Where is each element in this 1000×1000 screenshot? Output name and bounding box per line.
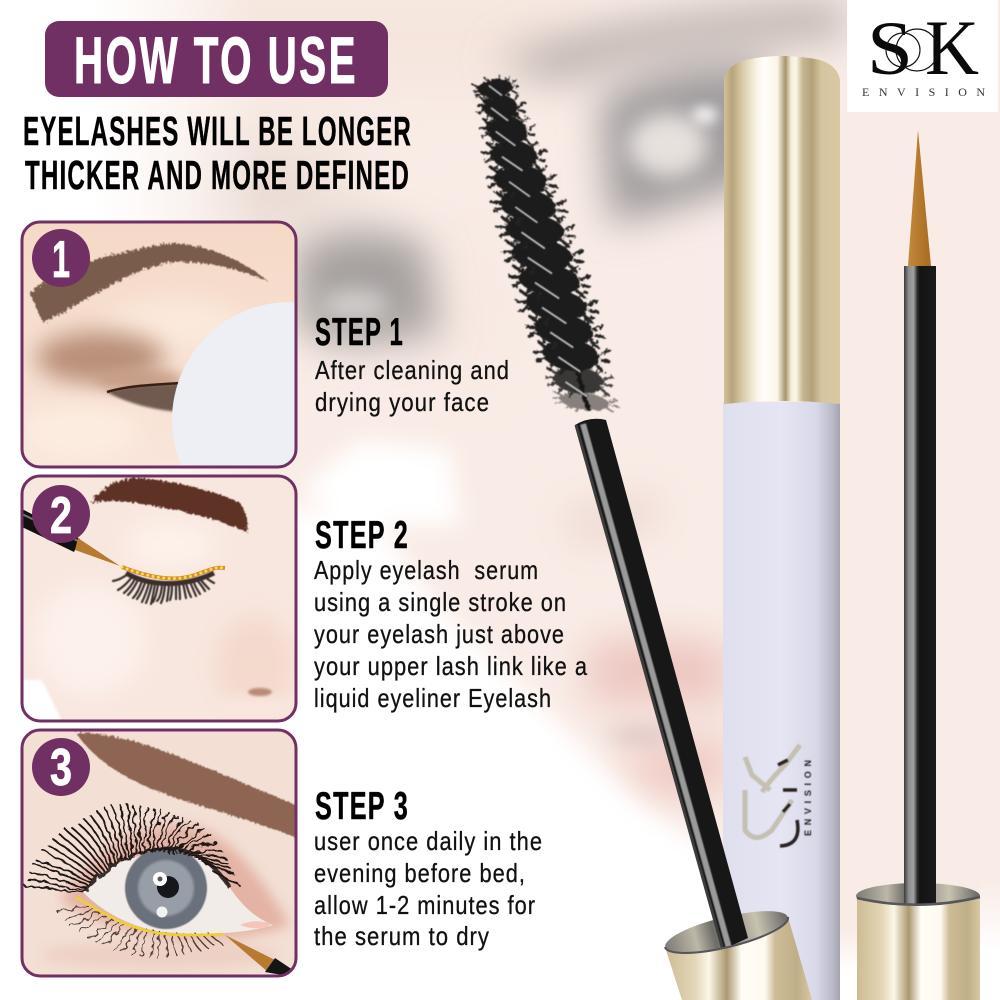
step 2 text: your eyelash just above <box>314 619 565 649</box>
subtitle <box>23 108 412 198</box>
tilted gold collar <box>665 917 812 1000</box>
dotted serum line <box>122 567 225 578</box>
product tube <box>723 56 840 1000</box>
step 1 text: After cleaning and <box>315 355 510 385</box>
tube logo: ENVISION <box>803 760 813 836</box>
eyebrow <box>90 478 247 532</box>
eye <box>83 847 273 934</box>
subtitle: THICKER AND MORE DEFINED <box>25 152 410 198</box>
badge: number 2: 2 <box>50 487 72 545</box>
step 1 text: STEP 1 <box>315 311 404 354</box>
step 1 text <box>315 311 510 417</box>
step 2 text: STEP 2 <box>315 514 409 557</box>
upper lashes <box>23 804 238 892</box>
yellow guide line <box>76 897 223 935</box>
badge: number 1 <box>32 229 90 289</box>
panel: step 2 photo <box>22 476 296 721</box>
iris <box>125 847 207 929</box>
panel: step 3 photo <box>22 730 296 976</box>
eyelashes <box>113 573 214 604</box>
step 2 text: liquid eyeliner Eyelash <box>314 683 552 713</box>
brand logo: K <box>925 4 979 91</box>
heading banner: HOW TO USE <box>74 23 358 97</box>
step 1 text: drying your face <box>315 387 490 417</box>
tube logo <box>745 745 813 846</box>
step 3 text: STEP 3 <box>315 785 409 828</box>
closed eyelid and lashes <box>107 383 180 412</box>
step 3 text: evening before bed, <box>314 858 526 888</box>
panel: step 1 photo <box>20 220 298 468</box>
mascara stem <box>575 419 748 950</box>
badge: number 1: 1 <box>52 231 70 289</box>
step 3 text: user once daily in the <box>314 826 543 856</box>
step 3 text: the serum to dry <box>314 921 490 951</box>
badge: number 3: 3 <box>50 739 72 797</box>
wand stem <box>904 266 936 906</box>
gold collar <box>857 897 980 1000</box>
brand logo: ENVISION <box>862 85 985 99</box>
badge: number 2 <box>32 485 90 545</box>
step 2 text: using a single stroke on <box>314 587 567 617</box>
eyebrow <box>30 243 268 323</box>
subtitle: EYELASHES WILL BE LONGER <box>23 108 412 154</box>
badge: number 3 <box>32 738 90 797</box>
brand logo: S <box>867 7 913 91</box>
cotton pad <box>172 302 294 466</box>
step 2 text: Apply eyelash serum <box>314 555 539 585</box>
applicator brush <box>225 935 291 974</box>
applicator brush <box>22 509 120 566</box>
fine brush tip <box>908 130 931 266</box>
eyebrow <box>76 733 296 838</box>
step 2 text <box>314 514 588 713</box>
right applicator wand <box>856 130 980 1000</box>
wand collar back rim <box>856 883 980 909</box>
lower lashes <box>57 905 222 958</box>
heading banner <box>45 21 388 97</box>
mascara wand <box>448 61 812 1000</box>
tube body <box>723 402 840 1000</box>
step 3 text <box>314 785 543 951</box>
step 2 text: your upper lash link like a <box>314 651 588 681</box>
gold cap <box>724 56 840 404</box>
step 3 text: allow 1-2 minutes for <box>314 890 536 920</box>
collar inner rim <box>662 903 791 961</box>
spoolie brush <box>448 61 635 436</box>
brand logo <box>847 0 998 112</box>
